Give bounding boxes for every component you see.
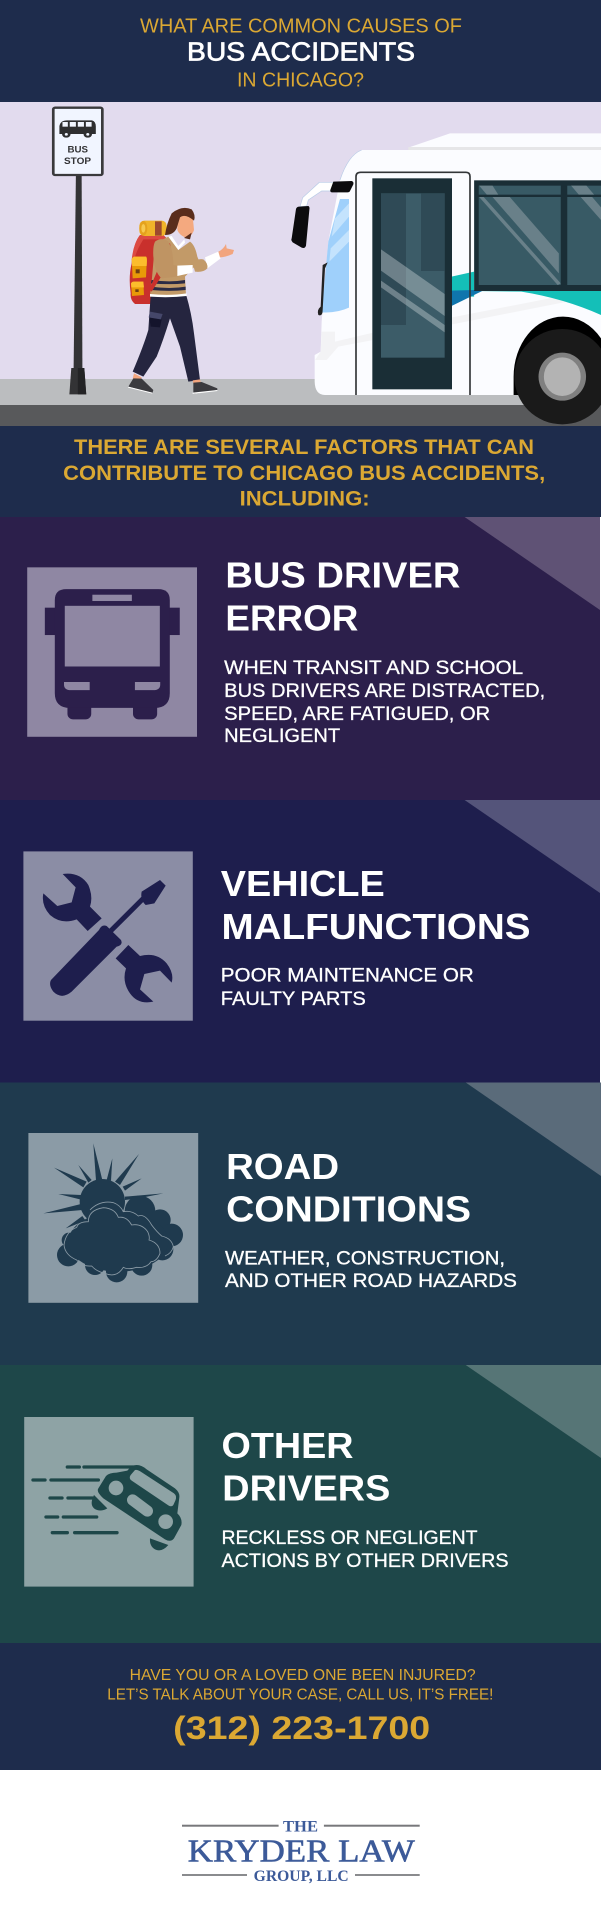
phone number: (312) 223-1700 bbox=[173, 1710, 430, 1746]
text block: ACTIONS BY OTHER DRIVERS bbox=[222, 1550, 508, 1572]
logo: the kryder law group: GROUP, LLC bbox=[254, 1868, 349, 1885]
text block bbox=[224, 657, 545, 747]
header: title: IN CHICAGO? bbox=[237, 69, 364, 91]
person with backpack bbox=[128, 208, 234, 394]
heading: OTHER bbox=[222, 1425, 354, 1466]
header: title bbox=[0, 0, 601, 102]
heading: ROAD bbox=[226, 1146, 339, 1187]
text block: BUS DRIVERS ARE DISTRACTED, bbox=[224, 680, 545, 702]
text block bbox=[221, 965, 474, 1010]
icon: skidding car bbox=[24, 1417, 194, 1587]
text block: POOR MAINTENANCE OR bbox=[221, 965, 474, 987]
heading bbox=[221, 863, 531, 947]
call to action footer bbox=[0, 1643, 601, 1770]
heading: VEHICLE bbox=[221, 863, 385, 904]
heading: DRIVERS bbox=[222, 1468, 390, 1509]
text block: SPEED, ARE FATIGUED, OR bbox=[224, 703, 490, 725]
text block: RECKLESS OR NEGLIGENT bbox=[222, 1527, 478, 1549]
text block bbox=[222, 1527, 508, 1572]
bus stop sign bbox=[53, 108, 102, 394]
text block: WHEN TRANSIT AND SCHOOL bbox=[224, 657, 523, 679]
text block bbox=[225, 1248, 517, 1292]
panel: other drivers bbox=[0, 1365, 601, 1643]
bus body bbox=[291, 133, 601, 395]
panel: road conditions bbox=[0, 1082, 601, 1366]
bus stop sign: STOP bbox=[64, 156, 92, 167]
bus door bbox=[356, 172, 470, 395]
intro heading band: CONTRIBUTE TO CHICAGO BUS ACCIDENTS, bbox=[63, 462, 545, 485]
heading bbox=[225, 555, 460, 639]
icon: bus front bbox=[27, 567, 197, 737]
intro heading band: THERE ARE SEVERAL FACTORS THAT CAN bbox=[74, 436, 534, 459]
logo: the kryder law group bbox=[182, 1819, 420, 1885]
text block: FAULTY PARTS bbox=[221, 988, 366, 1010]
heading: ERROR bbox=[225, 598, 358, 639]
icon: wrench and screwdriver bbox=[23, 851, 193, 1021]
call to action footer: HAVE YOU OR A LOVED ONE BEEN INJURED? bbox=[130, 1667, 476, 1684]
panel: bus driver error bbox=[0, 517, 600, 800]
heading: BUS DRIVER bbox=[225, 555, 460, 596]
panel: vehicle malfunctions bbox=[0, 800, 600, 1083]
call to action footer: LET’S TALK ABOUT YOUR CASE, CALL US, IT’S FREE! bbox=[107, 1686, 493, 1703]
text block: WEATHER, CONSTRUCTION, bbox=[225, 1248, 505, 1270]
text block: AND OTHER ROAD HAZARDS bbox=[225, 1270, 517, 1292]
bus side windows and stripe bbox=[452, 180, 601, 424]
logo: the kryder law group: THE bbox=[283, 1819, 318, 1836]
intro heading band: INCLUDING: bbox=[240, 487, 370, 510]
bus bbox=[291, 133, 601, 424]
heading bbox=[226, 1146, 471, 1229]
header: title: BUS ACCIDENTS bbox=[187, 39, 415, 67]
heading: MALFUNCTIONS bbox=[222, 906, 530, 947]
header: title: WHAT ARE COMMON CAUSES OF bbox=[140, 15, 462, 37]
illustration: bus stop scene bbox=[0, 102, 601, 426]
bus stop sign: BUS bbox=[68, 144, 88, 155]
text block: NEGLIGENT bbox=[224, 725, 340, 747]
logo: the kryder law group: KRYDER LAW bbox=[188, 1832, 416, 1868]
intro heading band bbox=[0, 426, 601, 517]
heading bbox=[222, 1425, 390, 1509]
heading: CONDITIONS bbox=[226, 1188, 471, 1229]
icon: sun and clouds bbox=[28, 1133, 198, 1303]
